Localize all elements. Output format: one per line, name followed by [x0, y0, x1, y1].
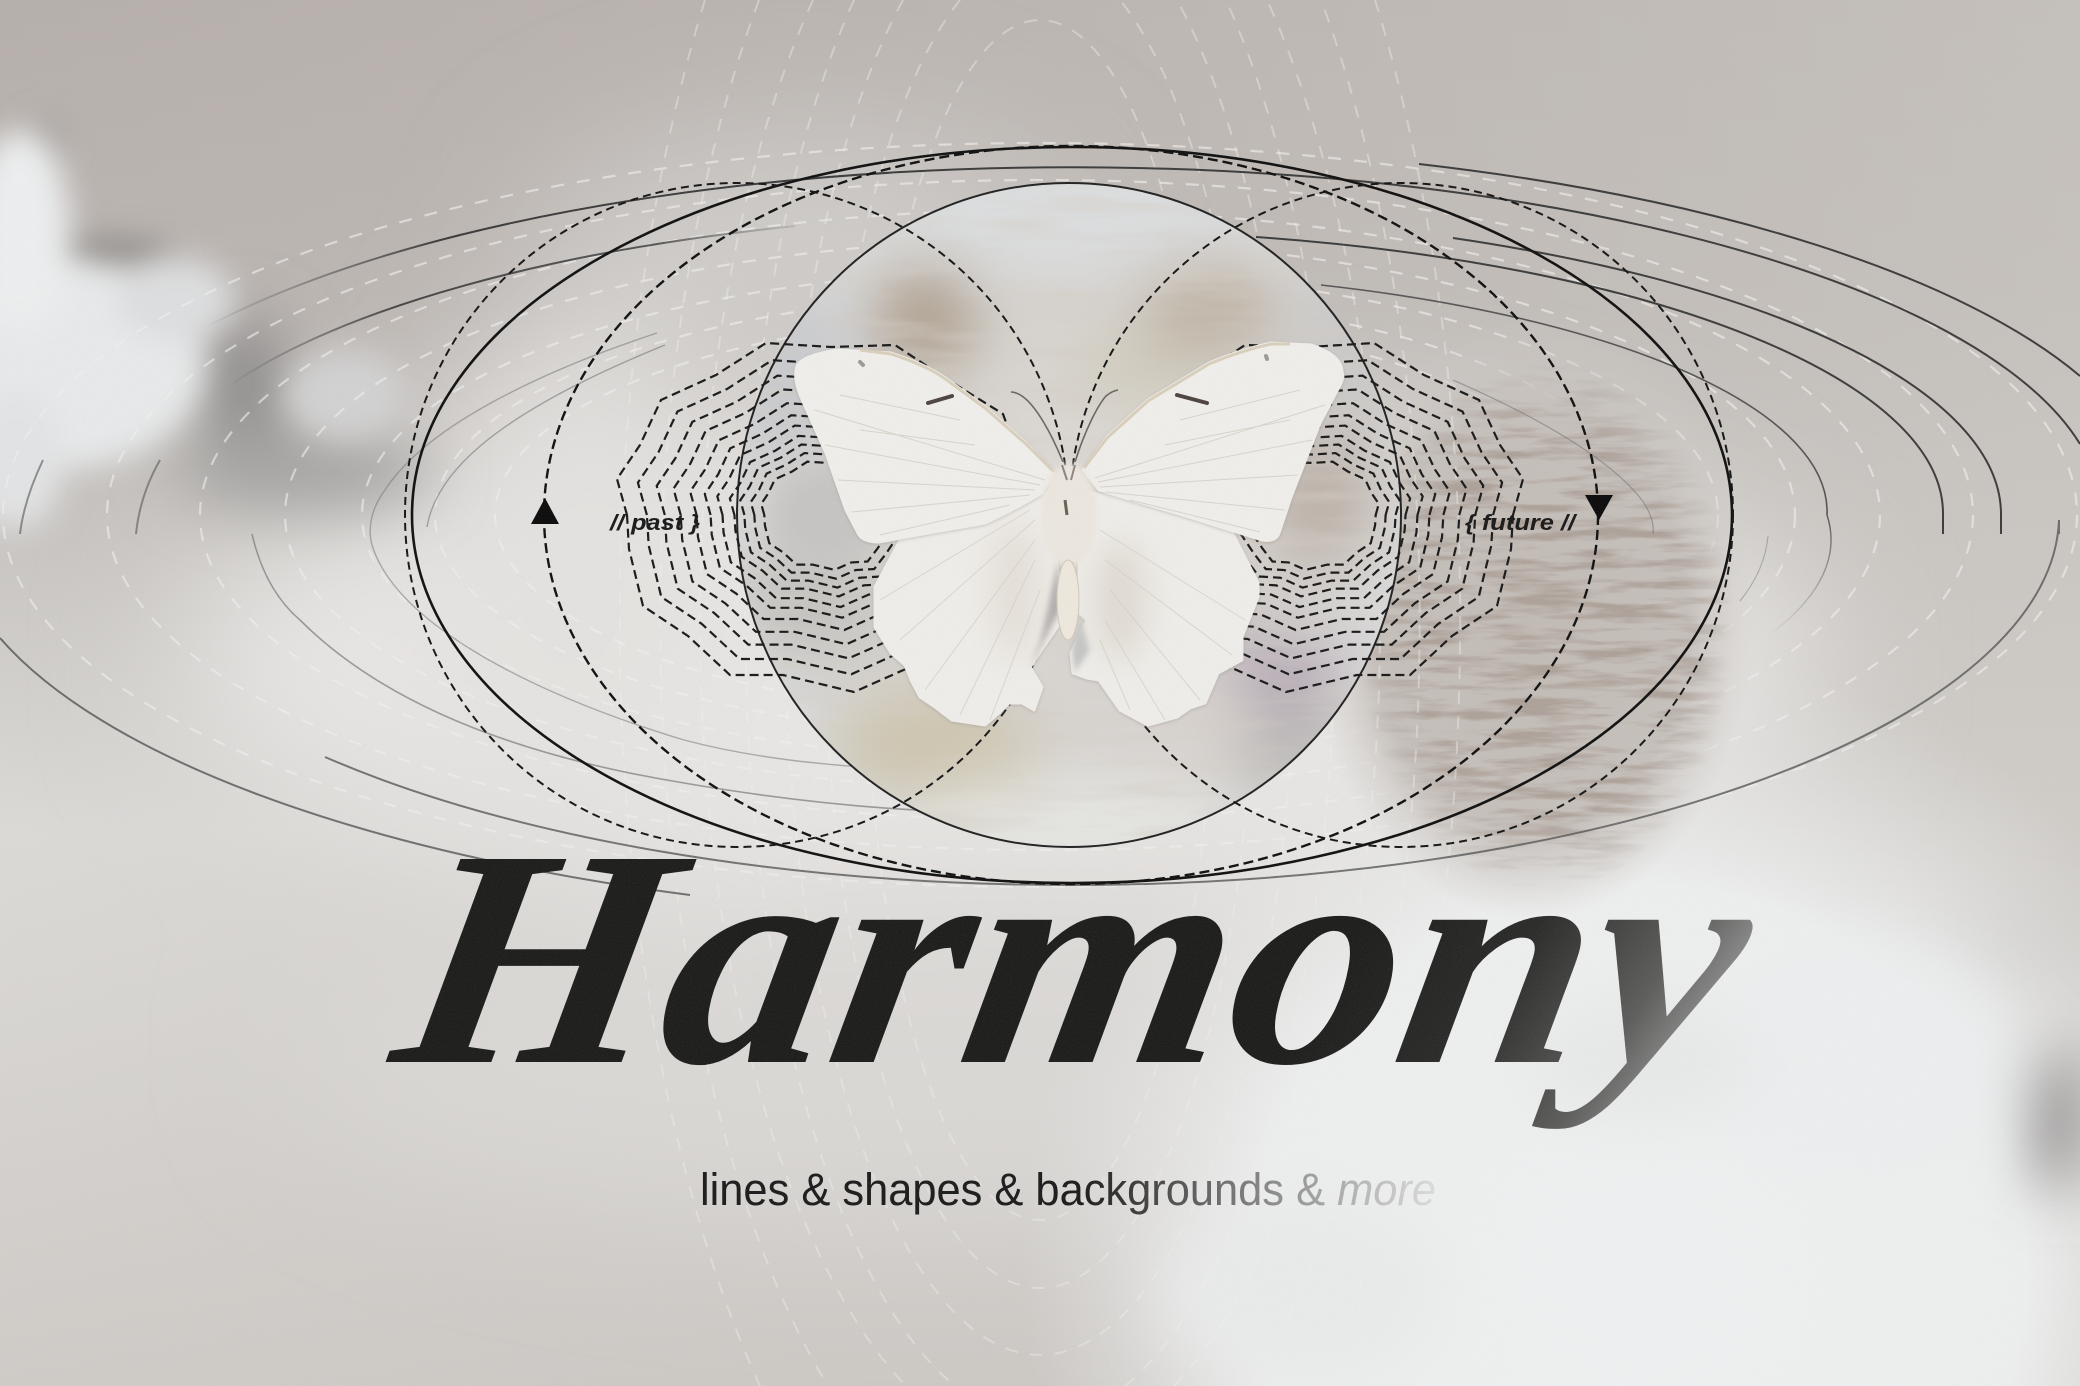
dashed circles [405, 183, 1733, 847]
label: future: { future // [1465, 510, 1578, 535]
lower right cloud [1000, 640, 2080, 1386]
arrow: future triangle [1585, 495, 1613, 520]
soft central cloud glow [180, 140, 1820, 1220]
inner hind wing shadows [987, 520, 1148, 672]
white dashed horizontal rings [3, 143, 2077, 887]
fore wing veins [815, 390, 1325, 535]
label: past: // past } [609, 510, 700, 535]
pearl circle outline [737, 183, 1401, 847]
body [1041, 463, 1097, 640]
arrow: past triangle [531, 498, 559, 524]
cloud shadows [170, 315, 2070, 1010]
hind wing veins [880, 510, 1245, 720]
pearl circle [738, 184, 1400, 834]
right fore wing [1083, 343, 1343, 540]
woven texture behind right rings [1305, 320, 1755, 920]
wavy dashed rings left [617, 343, 1037, 692]
wavy dashed rings right [1103, 343, 1523, 692]
main solid ellipse [412, 147, 1732, 883]
left fore wing [796, 350, 1054, 542]
left cloud [0, 120, 405, 530]
fore wing edges [860, 344, 1290, 472]
wing marks [860, 356, 1267, 403]
solid orbit lines [0, 164, 2080, 895]
antennae [1011, 390, 1118, 462]
title: Harmony [371, 786, 1780, 1130]
butterfly [796, 343, 1343, 725]
hind wings [875, 487, 1258, 725]
inner dashed arrow ellipse [544, 146, 1598, 884]
white dashed vertical rings [620, 0, 1460, 1386]
subtitle: lines & shapes & backgrounds & more [700, 1164, 1436, 1215]
